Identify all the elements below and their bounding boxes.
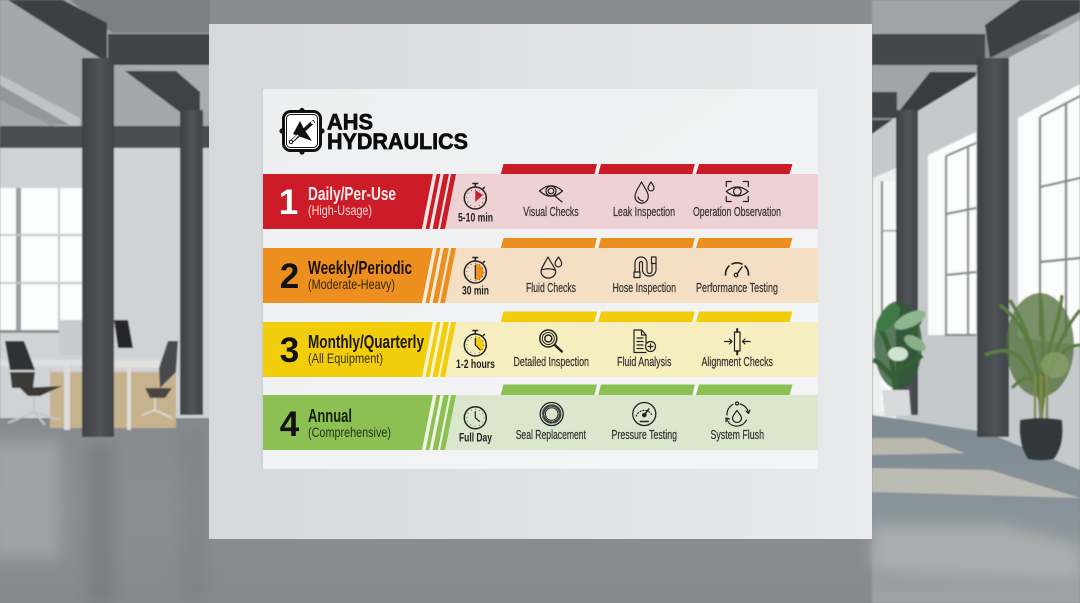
icon: flush cycle xyxy=(726,402,750,426)
plant in dark pot xyxy=(985,293,1080,460)
task: leak inspection xyxy=(613,182,675,219)
row 4: Annual xyxy=(263,384,818,450)
task: system flush: System Flush xyxy=(710,428,764,442)
row 1: Daily/Per-Use xyxy=(263,164,818,229)
right windows xyxy=(873,84,1080,420)
logo wordmark: AHS xyxy=(327,110,373,134)
category number: 3 xyxy=(280,331,299,370)
duration label: 30 min xyxy=(462,284,489,298)
task: pressure testing xyxy=(612,402,677,442)
category number: 1 xyxy=(279,183,298,222)
task: performance testing xyxy=(696,263,778,295)
task: visual checks xyxy=(523,186,579,219)
category title: Monthly/Quarterly xyxy=(308,332,424,352)
icon: stopwatch 30 min xyxy=(464,258,486,283)
task: performance testing: Performance Testing xyxy=(696,281,778,295)
left floor xyxy=(0,418,872,603)
task: operation observation: Operation Observation xyxy=(693,205,781,219)
row 2: Weekly/Periodic xyxy=(263,238,818,303)
category banner xyxy=(263,174,456,229)
left desk, monitors and chairs xyxy=(0,320,178,430)
category title: Weekly/Periodic xyxy=(308,258,412,278)
icon: stopwatch 1-2 hours xyxy=(464,330,486,356)
category subtitle: (Comprehensive) xyxy=(308,424,391,440)
task: system flush xyxy=(710,402,764,442)
maintenance board xyxy=(261,88,818,470)
task: alignment checks xyxy=(702,329,773,369)
task: fluid checks: Fluid Checks xyxy=(526,281,576,295)
logo icon xyxy=(279,108,325,155)
light band xyxy=(440,322,818,377)
task: leak inspection: Leak Inspection xyxy=(613,205,675,219)
icon: gauge xyxy=(725,263,749,277)
light band xyxy=(440,395,818,450)
task: pressure testing: Pressure Testing xyxy=(612,428,677,442)
duration label: 1-2 hours xyxy=(456,357,495,371)
icon: pressure gauge xyxy=(633,402,656,426)
light band xyxy=(440,174,818,229)
logo wordmark: HYDRAULICS xyxy=(327,129,468,154)
task: hose inspection: Hose Inspection xyxy=(612,281,676,295)
category banner xyxy=(263,395,456,450)
task: hose inspection xyxy=(612,257,676,295)
icon: eye with magnifier xyxy=(540,186,562,202)
category subtitle: (All Equipment) xyxy=(308,350,383,366)
icon: droplets xyxy=(635,182,654,203)
task: seal replacement xyxy=(516,402,586,442)
icon: alignment arrows xyxy=(724,329,750,354)
task: detailed inspection xyxy=(514,330,589,369)
category subtitle: (Moderate-Heavy) xyxy=(308,276,395,292)
duration label: 5-10 min xyxy=(458,210,493,224)
task tabs xyxy=(501,238,792,248)
icon: eye in focus frame xyxy=(726,182,748,202)
category title: Daily/Per-Use xyxy=(308,184,396,204)
row 3: Monthly/Quarterly xyxy=(263,312,818,377)
light band xyxy=(440,248,818,303)
category title: Annual xyxy=(308,406,352,426)
icon: clock full day xyxy=(464,407,486,429)
right columns xyxy=(896,58,1009,437)
category banner xyxy=(263,322,456,377)
left columns and beams xyxy=(8,0,210,437)
logo: AHS Hydraulics xyxy=(279,108,468,155)
task: operation observation xyxy=(693,182,781,219)
category number: 2 xyxy=(280,257,299,296)
right floor xyxy=(872,415,1080,603)
plant in white pot xyxy=(872,301,928,417)
task: fluid analysis: Fluid Analysis xyxy=(617,355,672,369)
task: detailed inspection: Detailed Inspection xyxy=(514,355,589,369)
task tabs xyxy=(501,312,792,322)
left back wall and window xyxy=(0,126,210,433)
right ceiling and side wall xyxy=(872,0,1080,470)
category subtitle: (High-Usage) xyxy=(308,202,372,218)
left ceiling xyxy=(0,0,210,142)
icon: fluid level drop xyxy=(541,257,562,278)
category number: 4 xyxy=(280,405,300,444)
icon: hose xyxy=(634,257,656,278)
icon: seal ring xyxy=(540,402,563,426)
task: visual checks: Visual Checks xyxy=(523,205,579,219)
duration label: Full Day xyxy=(459,431,492,445)
task: alignment checks: Alignment Checks xyxy=(702,355,773,369)
task: fluid checks xyxy=(526,257,576,295)
logo wordmark xyxy=(327,110,468,154)
task: fluid analysis xyxy=(617,330,672,369)
icon: magnifier xyxy=(540,330,562,352)
task tabs xyxy=(501,384,792,395)
task: seal replacement: Seal Replacement xyxy=(516,428,586,442)
wall panel xyxy=(209,24,872,539)
category banner xyxy=(263,248,456,303)
icon: stopwatch 5-10 min xyxy=(464,184,486,209)
icon: report document xyxy=(634,330,656,352)
task tabs xyxy=(501,164,792,174)
